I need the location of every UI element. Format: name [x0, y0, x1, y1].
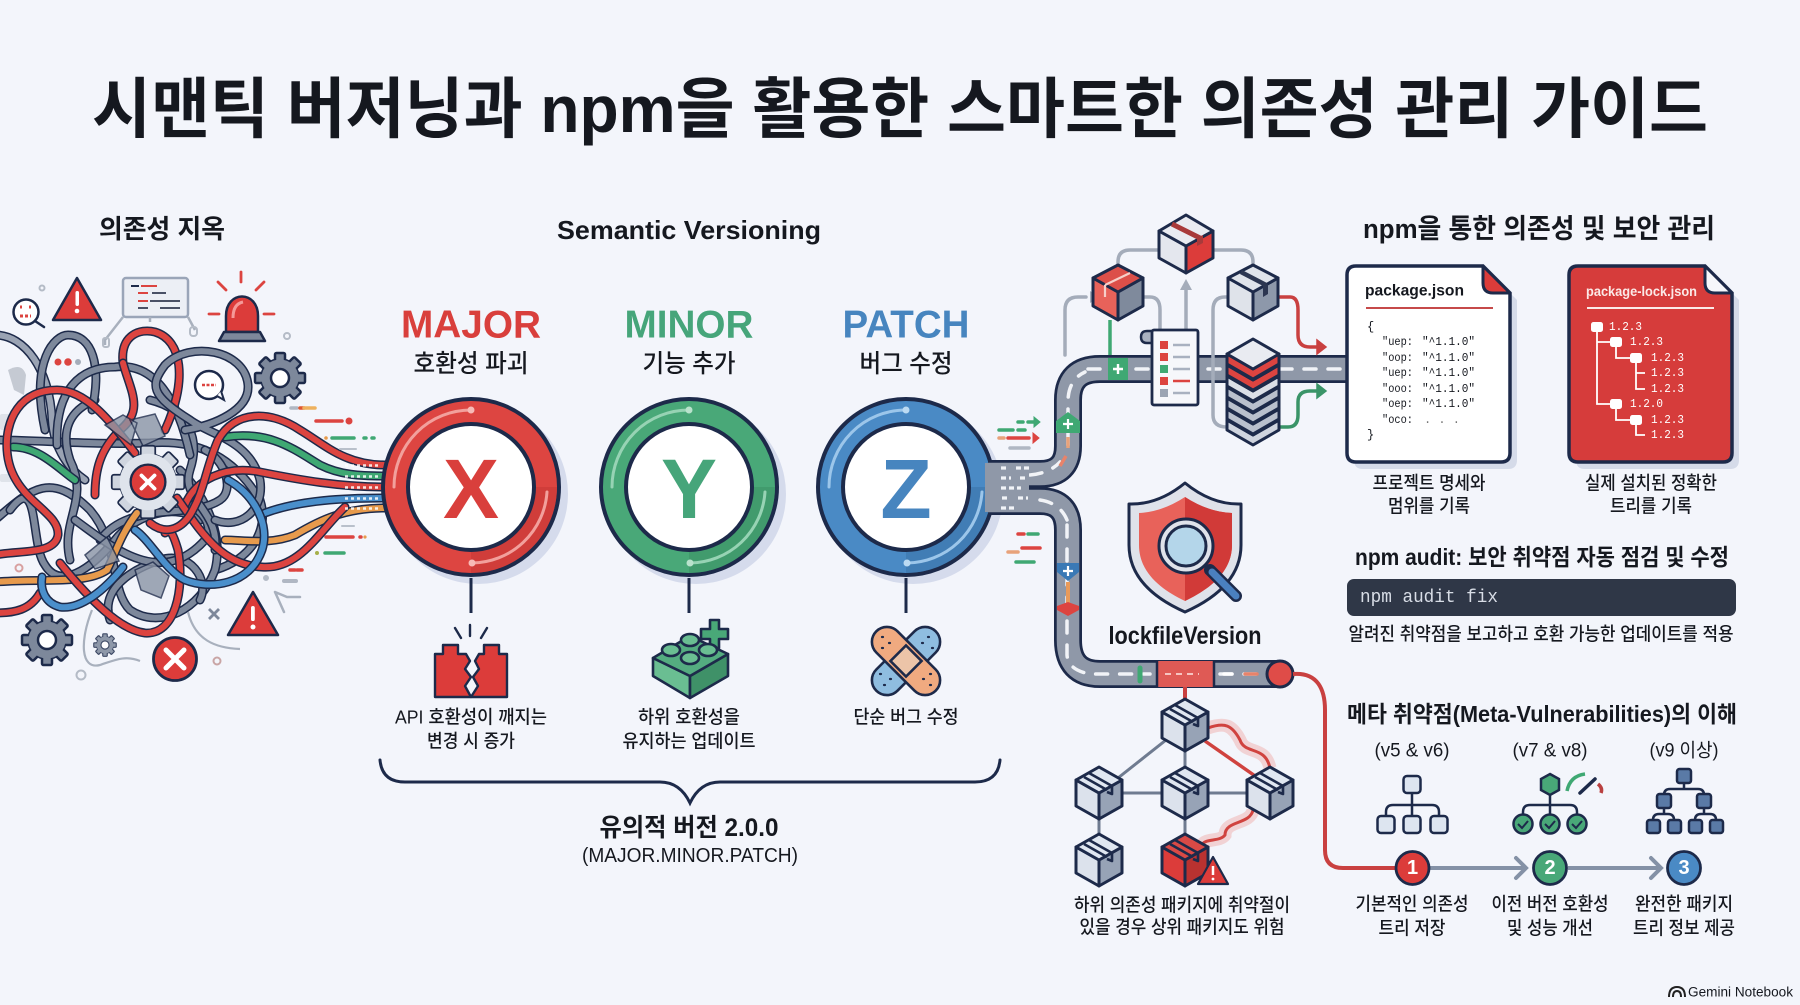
- caption: major: [395, 706, 547, 752]
- heading: meta vulnerabilities: 메타 취약점(Meta-Vulnerabilities)의 이해: [1347, 701, 1737, 727]
- caption: package-lock.json: 실제 설치된 정확한: [1585, 472, 1717, 494]
- icon: small gear: [94, 634, 116, 656]
- doc title: package.json: [1365, 282, 1464, 300]
- ring: X: X: [443, 442, 499, 536]
- icon: wire connector lights: [345, 466, 381, 508]
- caption: step 2: [1492, 894, 1608, 938]
- lock title: package-lock.json: [1586, 283, 1697, 299]
- arrow: 2 to 3: [1568, 858, 1661, 878]
- lock version tree: 1.2.3: [1609, 320, 1642, 334]
- marker: blue and red on lower road: [1057, 563, 1079, 616]
- warning triangle: [1198, 857, 1228, 884]
- panel: PATCH version: [818, 304, 1003, 728]
- icon: stray tool marks: [84, 609, 240, 666]
- step 2: [1534, 852, 1566, 884]
- doc code lines: "oop:: [1382, 351, 1413, 365]
- stem: [904, 578, 908, 613]
- panel: meta timeline: [1356, 740, 1735, 938]
- doc corner fold: [1483, 266, 1510, 293]
- label: lockfileVersion: lockfileVersion: [1108, 622, 1262, 650]
- icon: lego block with plus: [653, 620, 728, 698]
- sublabel: feature: 기능 추가: [642, 350, 736, 378]
- caption: major: 변경 시 증가: [427, 730, 515, 752]
- icon: shield with magnifier: [1129, 483, 1241, 612]
- lock version tree: [1591, 320, 1684, 442]
- stem: [688, 578, 690, 613]
- brace: groups three version parts: [380, 760, 1000, 803]
- icon: magnifier with error dots: [14, 300, 44, 327]
- panel: package-lock.json document: [1569, 266, 1739, 469]
- caption: step 1: 트리 저장: [1378, 918, 1446, 938]
- caption: transitive vulnerability: 하위 의존성 패키지에 취약절이: [1074, 894, 1290, 916]
- ring: Y: Y: [661, 442, 717, 536]
- doc code lines: "^1.1.0": [1422, 366, 1475, 380]
- text: audit description: 알려진 취약점을 보고하고 호환 가능한 업데이트를 적용: [1348, 624, 1734, 644]
- road: lower: [988, 500, 1280, 674]
- doc code lines: }: [1367, 428, 1374, 442]
- caption: package.json: 멈위를 기록: [1388, 496, 1470, 516]
- lock version tree: 1.2.3: [1630, 335, 1663, 349]
- marker: red vulnerable section: [1140, 660, 1257, 687]
- label: MINOR: MINOR: [624, 304, 754, 346]
- icon: dependency list document: [1141, 330, 1198, 405]
- icon: three dots: [54, 358, 81, 366]
- package boxes: [1076, 699, 1293, 886]
- vulnerable red package: [1162, 834, 1208, 886]
- red stub from road: [1183, 687, 1187, 700]
- caption: minor: [622, 706, 756, 752]
- caption: package.json: [1372, 472, 1486, 516]
- icon: full tree: [1647, 769, 1723, 833]
- command bar: npm audit fix: [1347, 579, 1736, 616]
- lock divider: [1587, 307, 1714, 309]
- lock version tree: 1.2.3: [1651, 351, 1684, 365]
- doc body: [1347, 266, 1510, 462]
- icon: tree with checks and gauge: [1514, 774, 1602, 834]
- step 3: 3: [1678, 857, 1690, 879]
- caption: step 2: 이전 버전 호환성: [1492, 894, 1608, 914]
- panel: MAJOR version: [383, 304, 568, 752]
- stem: [470, 578, 472, 613]
- lock shadow: [1576, 273, 1739, 469]
- icon: central error gear: [112, 446, 184, 518]
- doc code lines: "^1.1.0": [1422, 382, 1475, 396]
- lock corner fold: [1705, 266, 1732, 293]
- lock version tree: 1.2.3: [1651, 413, 1684, 427]
- step 3: [1668, 852, 1700, 884]
- vulnerability glow: [1202, 725, 1270, 845]
- sublabel: bug fix: 버그 수정: [860, 350, 952, 378]
- step 1: [1396, 852, 1429, 884]
- ring: Y: [601, 399, 786, 584]
- doc code lines: "oco:: [1382, 413, 1413, 427]
- caption: patch: 단순 버그 수정: [854, 706, 958, 728]
- version label 2: (v7 & v8): [1512, 740, 1588, 762]
- doc code lines: "^1.1.0": [1422, 351, 1475, 365]
- heading: npm audit: npm audit: 보안 취약점 자동 점검 및 수정: [1355, 544, 1729, 570]
- doc code lines: . . .: [1424, 413, 1460, 427]
- command bar: npm audit fix: npm audit fix: [1360, 588, 1498, 608]
- connector: road end to meta timeline: [1293, 674, 1396, 868]
- road: upper: [988, 369, 1347, 475]
- panel: vulnerable package graph: [1076, 687, 1293, 886]
- road network: [985, 358, 1347, 687]
- lock body: [1569, 266, 1732, 462]
- caption: major: API 호환성이 깨지는: [395, 706, 547, 728]
- caption: package.json: 프로젝트 명세와: [1372, 472, 1486, 494]
- doc code lines: {: [1367, 320, 1374, 334]
- heading: npm management: npm을 통한 의존성 및 보안 관리: [1363, 214, 1715, 244]
- caption: package-lock.json: 트리를 기록: [1610, 496, 1692, 516]
- road junction data block: [985, 463, 1030, 512]
- panel: dependency tangle illustration: [0, 272, 385, 680]
- doc divider: [1366, 307, 1493, 309]
- icon: gear bottom left: [22, 615, 72, 665]
- text: version format: (MAJOR.MINOR.PATCH): [582, 845, 798, 867]
- panel: MINOR version: [601, 304, 786, 752]
- icon: left package box: [1093, 265, 1143, 320]
- red link: [1205, 741, 1258, 778]
- heading: dependency hell: 의존성 지옥: [99, 214, 225, 244]
- icon: small rings: [16, 286, 290, 680]
- lock version tree: 1.2.3: [1651, 382, 1684, 396]
- lock version tree: 1.2.0: [1630, 397, 1663, 411]
- caption: minor: 유지하는 업데이트: [622, 730, 756, 752]
- icon: small faded fragments: [0, 367, 137, 482]
- lock version tree: 1.2.3: [1651, 428, 1684, 442]
- icon: top package box: [1159, 215, 1213, 273]
- version label 1: (v5 & v6): [1374, 740, 1450, 762]
- caption: step 1: [1356, 894, 1468, 938]
- version label 3: (v9 이상): [1650, 740, 1718, 762]
- icon: data dashes by Z: [999, 417, 1040, 562]
- connectors: package graph: [1065, 250, 1326, 427]
- doc code lines: "^1.1.0": [1422, 397, 1475, 411]
- doc code lines: "^1.1.0": [1422, 335, 1475, 349]
- doc code lines: "ooo:: [1382, 382, 1413, 396]
- icon: right package box: [1228, 265, 1278, 320]
- doc shadow: [1354, 273, 1517, 469]
- icon: gear right: [255, 353, 305, 403]
- icon: speech bubble: [195, 371, 224, 400]
- doc code lines: "uep:: [1382, 366, 1413, 380]
- step 2: 2: [1544, 857, 1556, 879]
- watermark: Gemini Notebook: Gemini Notebook: [1688, 984, 1793, 1000]
- chart: tangled wires: [0, 331, 385, 633]
- sublabel: breaking: 호환성 파괴: [414, 350, 528, 378]
- label: PATCH: PATCH: [842, 304, 970, 346]
- graph links: [1099, 725, 1270, 860]
- caption: step 3: 완전한 패키지: [1635, 894, 1733, 914]
- step 1: 1: [1407, 857, 1418, 879]
- caption: step 3: 트리 정보 제공: [1633, 918, 1735, 938]
- ring: Z: Z: [880, 442, 932, 536]
- marker: green on horizontal road: [1108, 358, 1128, 380]
- marker: green on vertical road: [1056, 412, 1080, 466]
- caption: transitive vulnerability: 있을 경우 상위 패키지도 위험: [1080, 916, 1284, 938]
- caption: transitive vulnerability: [1074, 894, 1290, 938]
- icon: basic tree: [1378, 776, 1448, 833]
- road end node: [1267, 661, 1293, 687]
- label: MAJOR: MAJOR: [401, 304, 541, 346]
- icon: data dashes around wires: [275, 408, 374, 612]
- lock version tree: 1.2.3: [1651, 366, 1684, 380]
- ring: X: [383, 399, 568, 584]
- caption: step 3: [1633, 894, 1735, 938]
- caption: minor: 하위 호환성을: [638, 706, 740, 728]
- doc code lines: [1367, 320, 1475, 442]
- caption: step 2: 및 성능 개선: [1507, 918, 1593, 938]
- caption: package-lock.json: [1585, 472, 1717, 516]
- icon: warning triangle top: [53, 278, 101, 320]
- caption: step 1: 기본적인 의존성: [1356, 894, 1468, 914]
- panel: package.json document: [1347, 266, 1517, 469]
- icon: code error window: [103, 278, 197, 347]
- doc code lines: "oep:: [1382, 397, 1413, 411]
- icon: crossed bandages: [866, 621, 946, 701]
- heading: semantic versioning: Semantic Versioning: [557, 215, 821, 245]
- icon: error circle: [154, 638, 196, 680]
- text: significant version: 유의적 버전 2.0.0: [600, 814, 778, 842]
- arrow: 1 to 2: [1430, 858, 1526, 878]
- ring: Z: [818, 399, 1003, 584]
- icon: server stack of packages: [1227, 339, 1279, 445]
- icon: warning triangle bottom: [228, 592, 278, 635]
- icon: alarm siren: [209, 272, 274, 341]
- icon: broken block: [435, 625, 507, 697]
- title: 시맨틱 버저닝과 npm을 활용한 스마트한 의존성 관리 가이드: [92, 72, 1708, 146]
- doc code lines: "uep:: [1382, 335, 1413, 349]
